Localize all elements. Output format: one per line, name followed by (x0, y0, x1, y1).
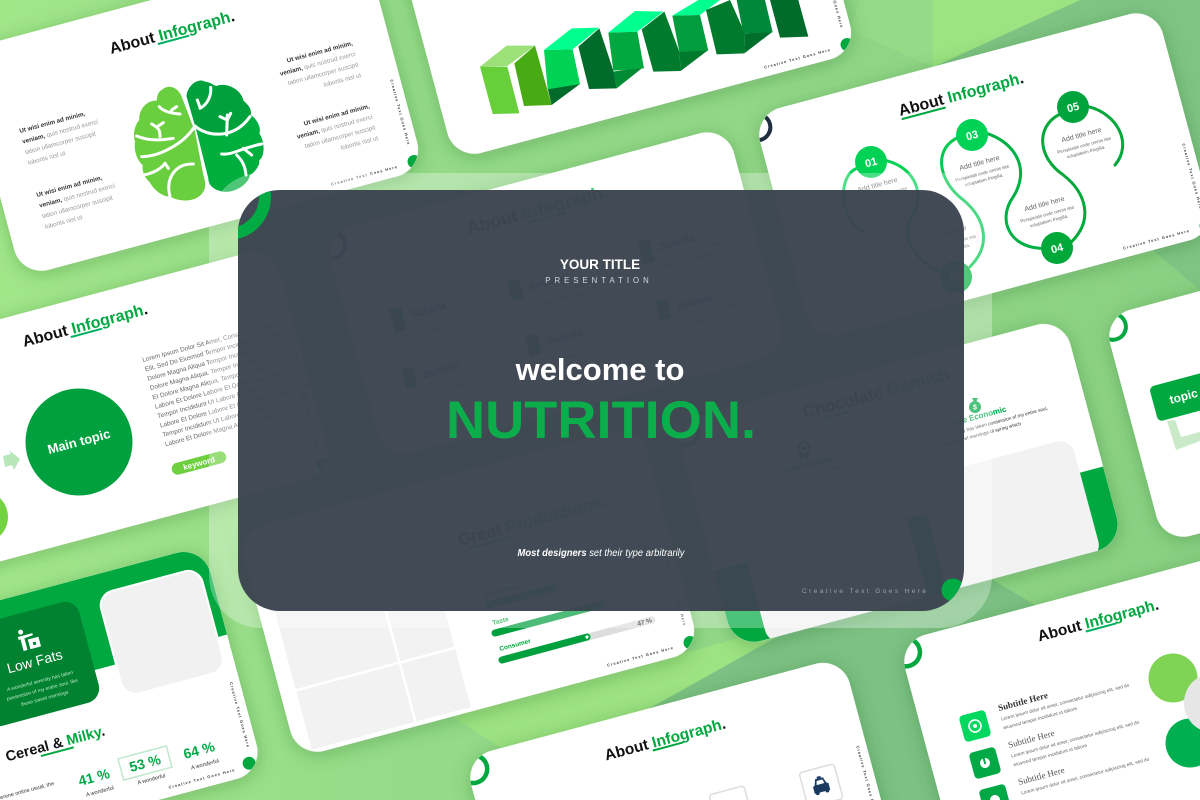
text block: left notes 2: veniam, quis nostrud exerci (39, 183, 116, 210)
panel: chocolate garnish slide (720, 321, 1124, 650)
text block: paragraph: Lorem Ipsum Dolor Sit Amet, Consectetur Adipiscing (142, 319, 287, 364)
text block: great choice (761, 448, 859, 499)
panel: numbered process slide: Creative Text Goes Here (1122, 228, 1190, 251)
panel: taxi icons slide (456, 657, 903, 800)
heading: About Infograph: About Infograph. (897, 70, 1026, 120)
heading: About Infograph: About Infograph. (1036, 597, 1161, 645)
arrow: into main topic (3, 450, 20, 470)
list: subtitles: Lorem ipsum dolor sit amet (680, 300, 740, 322)
text block: step 02 (919, 223, 979, 260)
text block: step 03: Add title here (959, 155, 1001, 172)
text block: step 03: voluptatem fringilla. (964, 172, 1004, 188)
step 03: 03 (965, 129, 980, 143)
text block: paragraph: Dolore Magna Aliqua Tempor Incididunt Ut Labore (147, 339, 285, 383)
tagline: Most designers set their type arbitrarily (518, 548, 685, 559)
panel: main topic slide: Creative Text Goes Here (239, 467, 307, 490)
list: subtitles: consectetur adipiscing (682, 311, 731, 329)
box: taxi icon tile (799, 764, 843, 800)
text block: left notes 2 (36, 172, 121, 231)
list: subtitles: Subtitle (658, 233, 697, 253)
icon: money bag: $ (973, 404, 977, 412)
list: subtitles (389, 221, 742, 402)
text block: great choice: of my entire soul, like these (782, 473, 843, 494)
text block: more economic: A wonderful serenity has taken possession of my entire soul, (923, 406, 1049, 445)
text block: low fats: these sweet mornings (21, 690, 70, 708)
heading: Cereal & Milky: Cereal & Milky. (4, 724, 107, 765)
panel: title card (238, 190, 964, 611)
step 03 (956, 119, 988, 151)
button: keyword (170, 450, 228, 476)
label: Production: Production (485, 583, 520, 599)
text block: more economic: More Economic (947, 404, 1008, 429)
label: Consumer: Consumer (499, 638, 532, 653)
text block: great choice: A wonderful serenity has taken possession (764, 461, 857, 491)
panel: subtitle icons slide (900, 557, 1200, 800)
heading: Great Productions: Great Productions. (456, 492, 609, 549)
text block: step 02: Add title here (926, 225, 968, 242)
text block: paragraph: Elit, Sed Do Eiusmod Tempor Incididunt Ut Labore Et (144, 328, 291, 373)
chart: serpentine curve (844, 107, 1123, 275)
text block: step 01: voluptatem fringilla. (862, 194, 902, 210)
panel: low fats slide: Creative Text Goes Here (229, 682, 251, 748)
text block: subtitle 2: Lorem ipsum dolor sit amet, consectetur adipiscing elit, sed do (1011, 719, 1140, 760)
text block: more economic: like these sweet mornings of spring which (935, 421, 1022, 450)
text block: left notes 1 (19, 108, 104, 167)
icon: taxi (811, 774, 831, 796)
stat: 64 percent (182, 738, 220, 772)
box: topic: topic (1168, 386, 1200, 407)
text block: right notes 2: tation ullamcorper suscipit (304, 124, 376, 150)
text block: low fats: Low Fats (5, 646, 64, 676)
panel: low fats slide (0, 546, 264, 800)
marker: progress end (585, 635, 589, 639)
list: subtitles: Subtitle (528, 273, 567, 293)
panel: brain slide (0, 0, 424, 277)
list: subtitles: consectetur adipiscing (552, 346, 601, 364)
panel: subtitle list slide (behind overlay) (483, 129, 749, 190)
icon: brain (134, 81, 264, 200)
list: subtitles: Lorem ipsum dolor sit amet (414, 308, 474, 330)
list: subtitles: consectetur adipiscing (664, 251, 713, 269)
circle: main topic (26, 388, 132, 496)
heading: About Infograph: About Infograph. (108, 8, 237, 58)
text block: great choice: Great Choice (782, 454, 833, 475)
text block: more economic (920, 394, 1051, 452)
panel: 3D bars slide: Creative Text Goes Here (763, 47, 831, 70)
text block: subtitle 3: Lorem ipsum dolor sit amet, consectetur adipiscing elit, sed do (1021, 756, 1150, 797)
stat: 53 percent: 53 % (128, 751, 163, 775)
text block: step 05: Perspiciatii unde omnis iste (1057, 135, 1112, 155)
text block: step 04: voluptatem fringilla. (1029, 213, 1069, 229)
text block: step 04 (1017, 194, 1077, 231)
circle: previous topic (0, 491, 8, 543)
text block: subtitle 1: eiusmod tempor incididunt ut labore (1003, 706, 1078, 731)
icon: person with box (16, 626, 41, 652)
text block: low fats: A wonderful serenity has taken (6, 670, 74, 693)
text block: subtitle 1: Subtitle Here (997, 690, 1049, 713)
box: empty icon tile (709, 786, 753, 800)
box: light connector (1167, 420, 1200, 450)
panel: 3D bars slide (394, 0, 857, 160)
text block: subtitle 1: Lorem ipsum dolor sit amet, consectetur adipiscing elit, sed do (1001, 682, 1130, 723)
text block: step 04: Perspiciatii unde omnis iste (1020, 204, 1075, 224)
text block: right notes 2 (293, 103, 379, 162)
footer text: Creative Text Goes Here (802, 588, 926, 595)
step 05 (1057, 91, 1089, 123)
text block: step 01 (850, 175, 910, 212)
list: subtitles: Lorem ipsum dolor sit amet (662, 240, 722, 262)
circle: grey (1184, 673, 1200, 733)
icon: medal (798, 442, 810, 460)
step 04 (1041, 232, 1073, 264)
text block: subtitle 2: Subtitle Here (1007, 728, 1056, 750)
stat: 53 percent: A wonderful (137, 773, 166, 786)
button: keyword: keyword (182, 455, 216, 472)
text block: paragraph: Tempor Incididunt Ut Labore Et Dolore Magna Aliqua (157, 375, 303, 420)
text block: right notes 2: lobortis nisl ut (340, 135, 379, 152)
list: subtitles: Subtitle (676, 293, 715, 313)
heading: welcome to: welcome to (515, 352, 684, 387)
panel: great productions slide: Creative Text Goes Here (665, 560, 688, 627)
list: subtitles: Subtitle (410, 301, 449, 321)
text block: left notes 1: veniam, quis nostrud exerci (22, 119, 99, 146)
panel: main topic slide: Creative Text Goes Here (298, 382, 321, 449)
icon: money bag (969, 398, 981, 413)
circle: dark green (1166, 718, 1200, 768)
text block: right notes 2: veniam, quis nostrud exerci (296, 114, 373, 141)
text block: paragraph (142, 316, 321, 448)
list: subtitles: consectetur adipiscing (534, 291, 583, 309)
heading: nutrition: NUTRITION. (446, 391, 756, 450)
subheading: presentation: PRESENTATION (545, 276, 653, 285)
step 05: 05 (1066, 101, 1081, 115)
text block: low fats (0, 644, 81, 711)
text block: step 03 (952, 153, 1012, 190)
icon tile: ball (958, 709, 992, 743)
list: subtitles: consectetur adipiscing (416, 319, 465, 337)
stat: 53 percent (118, 746, 175, 790)
text block: right notes 2: Ut wisi enim ad minim, (303, 103, 371, 128)
panel: low fats slide: Creative Text Goes Here (168, 767, 236, 790)
panel: brain slide: Creative Text Goes Here (389, 79, 412, 146)
list: subtitles: consectetur adipiscing (428, 379, 477, 397)
label: Taste: Taste (492, 616, 510, 627)
panel: brain slide: Creative Text Goes Here (330, 164, 398, 187)
circle: light green (1148, 654, 1198, 702)
text block: right notes 1: Ut wisi enim ad minim, (286, 40, 354, 65)
box: topic (1149, 364, 1200, 422)
text block: step 04: Add title here (1024, 196, 1066, 213)
step 01 (855, 146, 887, 178)
stat: 64 percent: A wonderful (190, 758, 220, 772)
list: subtitles: Subtitle (546, 328, 585, 348)
heading: About Infograph: About Infograph. (21, 301, 150, 351)
list: subtitles: Subtitle (422, 361, 461, 381)
text block: subtitle 2 (1007, 706, 1143, 768)
list: subtitles: Lorem ipsum dolor sit amet (532, 280, 592, 302)
text block: step 03: Perspiciatii unde omnis iste (955, 163, 1010, 183)
text block: left notes 1: lobortis nisl ut (27, 150, 66, 167)
step 04: 04 (1050, 241, 1066, 256)
text block: paragraph: Labore Et Dolore Labore Et Dolore Magna Aliqua Et (154, 366, 298, 411)
icon tile: emblem (968, 746, 1002, 780)
step 02 (940, 261, 972, 293)
text block: left notes 2: lobortis nisl ut (44, 214, 83, 231)
stat: 64 percent: 64 % (182, 738, 217, 762)
text block: right notes 1: lobortis nisl ut (323, 72, 362, 89)
panel: great productions slide (250, 599, 701, 761)
bar chart: progress bars (488, 563, 652, 660)
stat: 41 percent (77, 765, 115, 799)
text block: left notes 1: Ut wisi enim ad minim, (19, 111, 86, 135)
text block: paragraph: Labore Et Dolore Labore Et Dolore Magna Aliqua Dolore (159, 381, 316, 430)
text block: right notes 1: veniam, quis nostrud exerci (279, 51, 356, 78)
heading: About Infograph: About Infograph. (603, 716, 728, 764)
halo around title panel (209, 173, 992, 628)
panel: numbered process slide (754, 10, 1200, 308)
step 02: 02 (949, 271, 964, 285)
icon tile: drop (978, 783, 1012, 800)
step 01: 01 (864, 156, 879, 170)
text block: step 02: voluptatem fringilla. (931, 242, 971, 258)
panel: great productions slide: Creative Text Goes Here (606, 645, 674, 668)
heading: About Infograph: About Infograph. (464, 182, 610, 238)
text block: step 05: voluptatem fringilla. (1066, 144, 1106, 160)
text block: step 01: Perspiciatii unde omnis iste (853, 185, 908, 205)
text block: paragraph: Dolore Magna Aliqua. Tempor Incididunt Ut Labore Ut (149, 346, 297, 392)
text block: step 02: Perspiciatii unde omnis iste (922, 233, 977, 253)
text block: right notes 1 (276, 40, 362, 99)
list: subtitles: Lorem ipsum dolor sit amet (426, 368, 486, 390)
stat: 41 percent: 41 % (77, 765, 112, 789)
text block: subtitle 3: Subtitle Here (1017, 765, 1066, 787)
stat: 41 percent: A wonderful (85, 785, 115, 799)
text block: left notes 1: tation ullamcorper suscipit (24, 131, 97, 156)
text block: step 05: Add title here (1061, 127, 1103, 144)
text block: step 05 (1054, 125, 1114, 162)
text block: step 01: Add title here (857, 177, 899, 194)
text block: low fats: possession of my entire soul, like (6, 678, 79, 703)
text block: paragraph: Tempor Incididunt Ut Labore Et Dolore Magna Aliqua (162, 393, 308, 439)
text block: left notes 2: tation ullamcorper suscipit (41, 195, 114, 220)
value: 47 percent: 47 % (637, 617, 653, 628)
text block: paragraph: Labore Et Dolore Magna Aliqua Tempor Incididunt (164, 405, 302, 448)
text block: left notes 2: Ut wisi enim ad minim, (36, 175, 103, 199)
circle: main topic: Main topic (46, 426, 112, 457)
panel: main topic slide (0, 253, 238, 573)
list: subtitles: Lorem ipsum dolor sit amet (550, 335, 610, 357)
text block: subtitle 1 (997, 669, 1133, 731)
text block: subtitle 2: eiusmod tempor incididunt ut labore (1013, 743, 1088, 768)
text block: paragraph: Et Dolore Magna Aliqua. Tempor Incididunt Ut Labore (152, 355, 300, 401)
heading: Chocolate Garnish: Chocolate Garnish (801, 365, 952, 422)
panel: topic slide (1104, 288, 1200, 546)
heading: your title: YOUR TITLE (560, 257, 640, 272)
chart: 3D ribbon (480, 0, 808, 114)
text block: right notes 1: tation ullamcorper suscipit (287, 61, 359, 87)
